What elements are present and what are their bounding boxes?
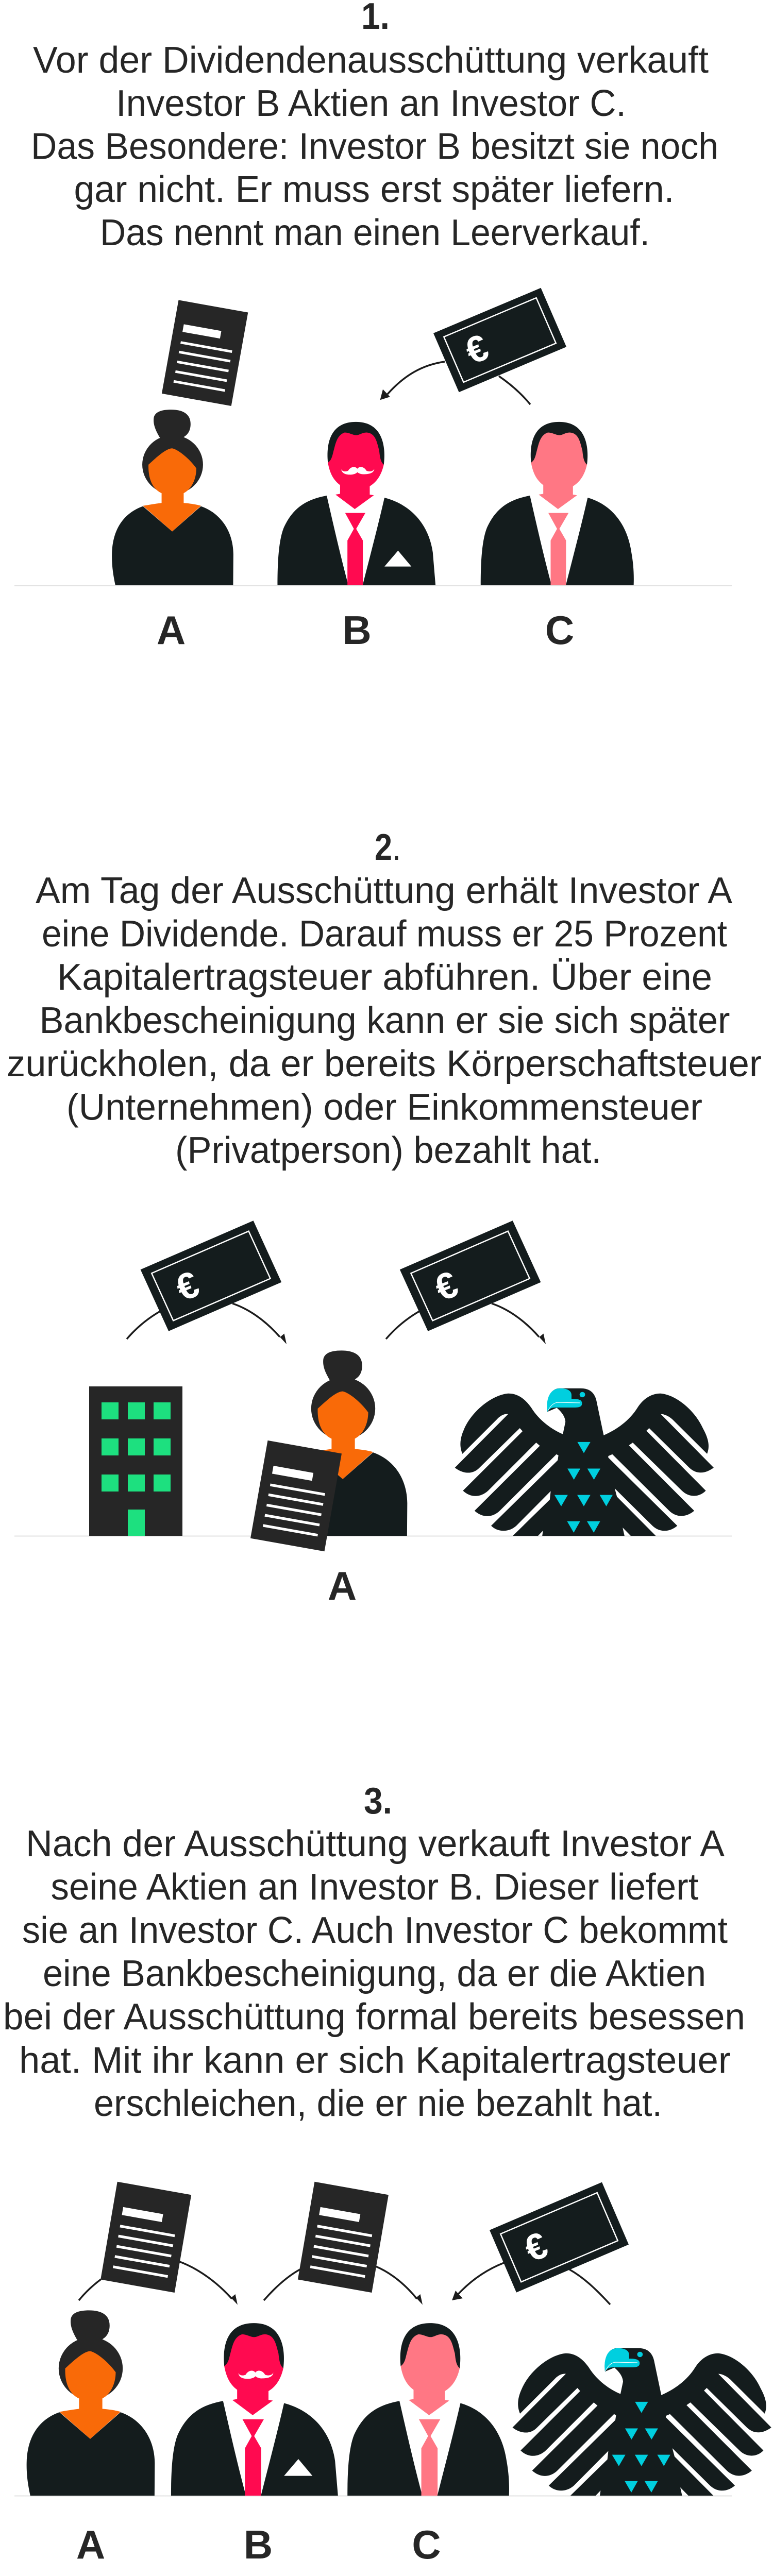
person A: [112, 410, 233, 585]
step number 3: 3.: [364, 1781, 392, 1822]
text block: step 2: eine Dividende. Darauf muss er 25 Prozent: [42, 913, 727, 955]
icon: federal eagle: [455, 1388, 714, 1536]
label B: B: [244, 2522, 273, 2567]
text block: step 2: Am Tag der Ausschüttung erhält Investor A: [36, 870, 732, 911]
icon: euro banknote, A to tax office: €: [429, 1263, 464, 1310]
person A: [279, 1350, 407, 1536]
text block: step 3: [3, 1823, 745, 2124]
person B: [171, 2323, 338, 2496]
icon: euro banknote, company to A: €: [170, 1263, 205, 1310]
arrow: from B to C: [264, 2266, 423, 2305]
person A: [27, 2310, 155, 2496]
label B: B: [342, 607, 372, 653]
arrow: from tax office to C: [452, 2263, 610, 2304]
icon: euro banknote, company to A: [141, 1221, 281, 1331]
text block: step 2: [7, 870, 762, 1171]
arrow: from C to B: [380, 362, 530, 404]
label A: A: [157, 607, 186, 653]
text block: step 1: [31, 40, 718, 253]
text block: step 1: Das Besondere: Investor B besitzt sie noch: [31, 126, 718, 167]
label C: C: [545, 607, 574, 653]
label C: C: [412, 2522, 441, 2567]
panel: step 2: [7, 827, 762, 1608]
person C: [481, 422, 634, 585]
text block: step 2: Bankbescheinigung kann er sie sich später: [39, 1000, 730, 1041]
label A: A: [76, 2522, 105, 2567]
text block: step 3: sie an Investor C. Auch Investor C bekommt: [22, 1910, 728, 1951]
icon: document, A to B: [100, 2182, 191, 2293]
icon: euro banknote: [433, 288, 566, 392]
icon: euro banknote, A to tax office: [400, 1221, 541, 1331]
arrow: from A to B: [79, 2261, 238, 2305]
text block: step 1: Investor B Aktien an Investor C.: [116, 83, 626, 124]
icon: euro banknote: [490, 2182, 629, 2293]
arrow: from building to A: [127, 1303, 287, 1344]
person C: [347, 2323, 509, 2496]
text block: step 3: bei der Ausschüttung formal bereits besessen: [3, 1996, 745, 2038]
icon: document held by A: [250, 1440, 342, 1551]
text block: step 1: Vor der Dividendenausschüttung verkauft: [33, 40, 709, 81]
text block: step 3: hat. Mit ihr kann er sich Kapitalertragsteuer: [19, 2040, 731, 2081]
person B: [277, 422, 435, 585]
text block: step 2: Kapitalertragsteuer abführen. Über eine: [57, 957, 712, 998]
text block: step 1: gar nicht. Er muss erst später liefern.: [74, 169, 674, 210]
icon: document, B to C: [298, 2182, 389, 2293]
icon: euro banknote: €: [519, 2224, 553, 2270]
panel: step 3: [3, 1781, 771, 2567]
text block: step 3: Nach der Ausschüttung verkauft Investor A: [26, 1823, 725, 1865]
label A: A: [328, 1563, 357, 1608]
text block: step 2: zurückholen, da er bereits Körperschaftsteuer: [7, 1043, 762, 1084]
text block: step 3: erschleichen, die er nie bezahlt hat.: [94, 2083, 662, 2124]
text block: step 1: Das nennt man einen Leerverkauf.: [100, 212, 650, 253]
icon: euro banknote: €: [460, 327, 494, 372]
icon: document above A: [162, 300, 248, 406]
text block: step 2: (Unternehmen) oder Einkommensteuer: [66, 1087, 702, 1128]
text block: step 2: (Privatperson) bezahlt hat.: [175, 1130, 601, 1171]
text block: step 3: eine Bankbescheinigung, da er die Aktien: [43, 1953, 706, 1994]
text block: step 3: seine Aktien an Investor B. Dieser liefert: [51, 1867, 699, 1908]
icon: company building: [89, 1386, 182, 1536]
panel: step 1: [14, 0, 732, 653]
step number 2: 2.: [375, 827, 401, 868]
arrow: from A to tax office: [386, 1303, 546, 1344]
icon: federal eagle: [512, 2348, 771, 2496]
